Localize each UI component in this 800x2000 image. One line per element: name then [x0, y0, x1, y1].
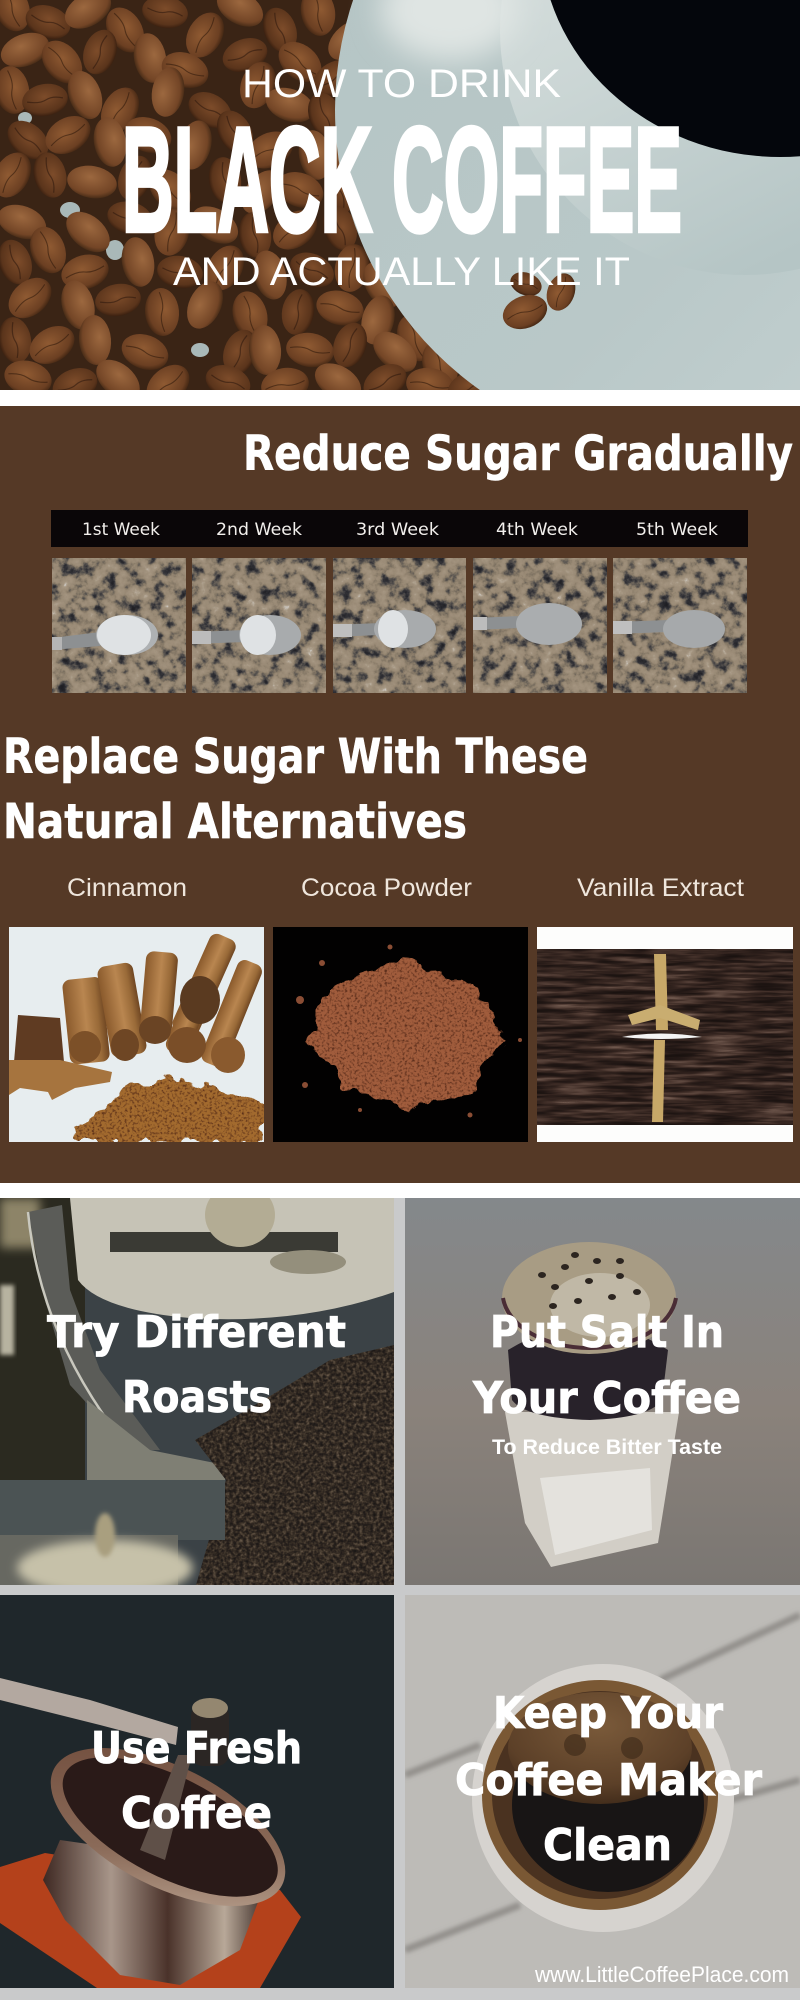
salt shaker photo [502, 1242, 679, 1567]
website url: www.LittleCoffeePlace.com [534, 1962, 789, 1987]
heading: put salt in your coffee [472, 1314, 740, 1414]
hero photo: coffee beans [0, 0, 480, 390]
heading: replace sugar with natural alternatives: Replace Sugar With These [3, 729, 588, 785]
label: vanilla extract: Vanilla Extract [577, 874, 744, 902]
subheading: to reduce bitter taste: To Reduce Bitter Taste [492, 1436, 722, 1459]
heading: try different roasts: Try Different [47, 1307, 346, 1358]
week header bar [51, 510, 748, 547]
hero title: and actually like it: AND ACTUALLY LIKE IT [173, 250, 630, 294]
photo: week 1 spoon [52, 558, 186, 693]
photo: week 2 spoon [192, 558, 326, 693]
hero photo: cup [370, 0, 800, 213]
photo: cocoa powder [273, 927, 528, 1142]
photo: week 3 spoon [333, 558, 466, 693]
heading: keep your coffee maker clean: Keep Your [493, 1688, 723, 1739]
heading: keep your coffee maker clean: Coffee Maker [455, 1755, 762, 1806]
heading: try different roasts: Roasts [122, 1372, 272, 1423]
panel: sugar section [0, 406, 800, 1183]
bottom grid background [0, 1198, 800, 2000]
heading: put salt in your coffee: Your Coffee [472, 1373, 741, 1424]
heading: use fresh coffee: Coffee [121, 1788, 272, 1839]
week header bar: 3rd Week [356, 520, 439, 540]
week header bar: 4th Week [496, 520, 578, 540]
coffee grinder photo [0, 1678, 309, 1988]
coffee cup photo [405, 1615, 800, 1950]
heading: try different roasts [46, 1314, 346, 1413]
heading: use fresh coffee: Use Fresh [91, 1723, 302, 1774]
heading: keep your coffee maker clean: Clean [543, 1820, 672, 1871]
photo: week 4 spoon [473, 558, 607, 693]
heading: put salt in your coffee: Put Salt In [490, 1307, 724, 1358]
hero photo: loose beans on saucer [502, 272, 576, 330]
photo: vanilla beans [537, 927, 793, 1142]
label: cocoa powder: Cocoa Powder [301, 874, 472, 902]
heading: replace sugar with natural alternatives: Natural Alternatives [3, 794, 467, 850]
heading: replace sugar with natural alternatives [3, 729, 588, 850]
photo: week 5 spoon [613, 558, 747, 693]
week header bar: 5th Week [636, 520, 718, 540]
heading: use fresh coffee [94, 1730, 300, 1829]
panel: try different roasts [0, 1183, 394, 1596]
panel: use fresh coffee [0, 1595, 394, 1988]
roaster photo [0, 1183, 394, 1596]
photo: cinnamon [9, 927, 264, 1142]
panel: put salt in your coffee [405, 1198, 800, 1585]
heading: keep your coffee maker clean [455, 1688, 762, 1871]
hero title: how to drink: HOW TO DRINK [242, 62, 561, 106]
panel: hero header [0, 0, 800, 390]
label: cinnamon: Cinnamon [67, 874, 187, 902]
week header bar: 2nd Week [216, 520, 302, 540]
hero photo: saucer [335, 0, 800, 390]
week header bar: 1st Week [82, 520, 160, 540]
panel: keep your coffee maker clean [405, 1595, 800, 1988]
